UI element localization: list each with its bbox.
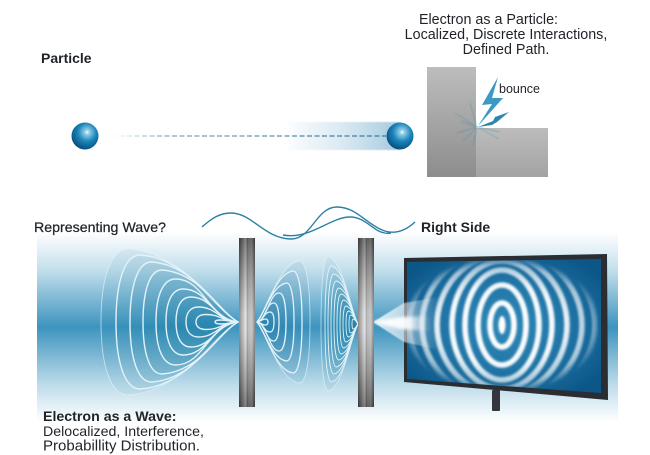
- icon: large lightning bolt: [478, 77, 503, 126]
- text block: electron as a wave: [43, 409, 204, 454]
- light beam to screen: [373, 297, 440, 350]
- icon: electron sphere end: [386, 122, 414, 150]
- monitor frame: [404, 254, 608, 400]
- heading: electron as a particle: Electron as a Particle:: [419, 12, 558, 28]
- slit plate: second: [358, 238, 374, 407]
- text block: electron as a wave: Delocalized, Interference,: [43, 423, 204, 439]
- interference rings: [407, 260, 599, 388]
- text block: electron as a wave: Probabillity Distribution.: [43, 438, 200, 454]
- monitor stand: [492, 390, 500, 411]
- heading: electron as a particle: Localized, Discrete Interactions,: [405, 27, 607, 43]
- label: bounce: bounce: [499, 82, 540, 96]
- heading: right side: Right Side: [421, 219, 490, 235]
- horizontal block: [476, 128, 548, 177]
- heading: electron as a particle: Defined Path.: [463, 42, 549, 58]
- slit plate: first: [239, 238, 255, 407]
- wave funnel: second, after first slit: [257, 261, 310, 383]
- motion trail: [285, 122, 400, 150]
- barrier: L-shaped block with impact: [427, 67, 548, 177]
- heading: Particle: Particle: [41, 50, 92, 66]
- wave funnel: third, before second slit: [321, 257, 358, 391]
- wave funnel: first, before slit: [101, 249, 238, 395]
- heading: representing wave: Representing Wave?: [34, 219, 166, 235]
- heading: electron as a particle: [405, 12, 607, 58]
- wave background band: [37, 232, 618, 422]
- monitor: [404, 245, 608, 405]
- sine wave curves: [202, 207, 415, 239]
- particle trajectory: [112, 122, 400, 150]
- icon: electron sphere start: [72, 122, 98, 150]
- monitor screen: [407, 259, 601, 393]
- vertical block: [427, 67, 476, 177]
- icon: small lightning bolt: [478, 112, 509, 127]
- impact sparks: [455, 103, 500, 146]
- dashed path: [112, 135, 386, 137]
- text block: electron as a wave: Electron as a Wave:: [43, 409, 177, 425]
